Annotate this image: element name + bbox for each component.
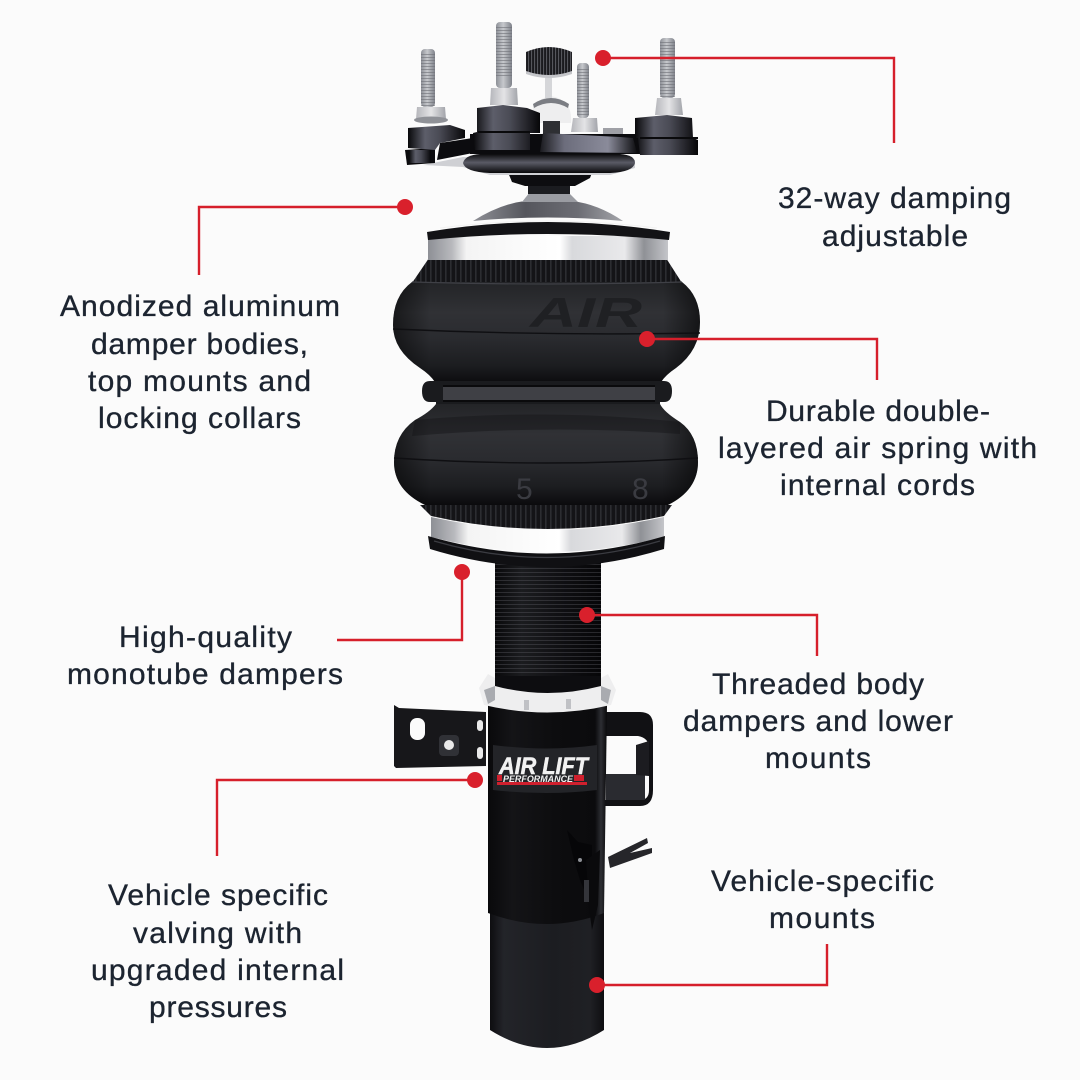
adjuster knob and stem	[526, 47, 572, 135]
lower air spring bellow: 5	[516, 473, 533, 506]
label text 5	[683, 668, 953, 775]
red dot 1	[595, 50, 611, 66]
bolts and nuts	[414, 22, 683, 132]
upper air spring bellow: AIR	[528, 289, 643, 336]
left bracket	[394, 705, 486, 768]
label text 7: Vehicle-specific	[711, 865, 934, 898]
leader line 1	[603, 58, 894, 143]
lower silver band	[431, 517, 664, 552]
upper tube section	[488, 705, 607, 924]
leader line 7	[597, 944, 827, 985]
leader line 4	[337, 572, 462, 640]
label text 2: top mounts and	[88, 365, 311, 398]
label text 6: upgraded internal	[91, 954, 344, 987]
tube mount detail	[567, 830, 600, 930]
right bracket	[598, 712, 653, 806]
red dot 2	[397, 199, 413, 215]
label text 6: valving with	[133, 917, 302, 950]
lower black ring	[428, 536, 665, 567]
callout: vehicle specific valving	[91, 772, 483, 1024]
red dot 7	[589, 977, 605, 993]
label text 3	[718, 395, 1037, 502]
callout: 32-way damping adjustable	[595, 50, 1011, 253]
leader line 2	[199, 207, 405, 275]
top mount hub	[507, 170, 593, 186]
label text 1	[778, 182, 1011, 253]
red dot 5	[579, 607, 595, 623]
label text 6: Vehicle specific	[108, 879, 328, 912]
label text 1: adjustable	[822, 220, 968, 253]
red dot 6	[467, 772, 483, 788]
upper air spring bellow	[393, 282, 700, 384]
air strut product image	[393, 22, 700, 1048]
spring dome cap	[473, 201, 623, 221]
label text 4: monotube dampers	[67, 658, 343, 691]
callout: anodized aluminum	[60, 199, 413, 435]
lower air spring bellow	[394, 404, 698, 506]
upper ribbed neck	[412, 258, 682, 283]
callout: threaded body	[579, 607, 953, 775]
label text 5: mounts	[765, 742, 871, 775]
label text 3: Durable double-	[766, 395, 990, 428]
leader line 6	[217, 780, 475, 856]
upper silver band	[428, 236, 668, 260]
callout: vehicle-specific mounts	[589, 865, 934, 993]
top mount plate and knobs	[405, 105, 698, 175]
lower tube section	[490, 900, 604, 1048]
logo band: Air Lift Performance: PERFORMANCE	[503, 774, 574, 785]
label text 2: Anodized aluminum	[60, 290, 340, 323]
leader line 5	[587, 615, 817, 656]
shaft neck	[522, 183, 578, 202]
label text 5: Threaded body	[712, 668, 924, 701]
waist ring	[422, 381, 672, 402]
callout: monotube dampers	[67, 564, 470, 691]
logo band: Air Lift Performance: AIR LIFT	[498, 753, 590, 780]
label text 2: locking collars	[98, 402, 301, 435]
label text 2	[60, 290, 340, 435]
red dot 3	[639, 331, 655, 347]
label text 3: internal cords	[780, 469, 975, 502]
silver locking collar	[479, 674, 616, 712]
label text 3: layered air spring with	[718, 432, 1037, 465]
callout: durable air spring	[639, 331, 1037, 502]
mounting tab	[608, 838, 652, 868]
waist of air spring	[436, 374, 660, 412]
label text 7	[711, 865, 934, 935]
upper black ring	[427, 221, 670, 240]
label text 2: damper bodies,	[91, 328, 308, 361]
red dot 4	[454, 564, 470, 580]
label text 7: mounts	[769, 902, 875, 935]
lower ribbed neck	[420, 505, 672, 529]
threaded damper body	[495, 562, 601, 697]
label text 6: pressures	[149, 991, 287, 1024]
leader line 3	[647, 339, 877, 380]
label text 1: 32-way damping	[778, 182, 1011, 215]
label text 6	[91, 879, 344, 1024]
label text 4	[67, 621, 343, 691]
lower air spring bellow: 8	[632, 473, 649, 506]
logo band: Air Lift Performance	[493, 745, 597, 793]
label text 4: High-quality	[119, 621, 292, 654]
label text 5: dampers and lower	[683, 705, 953, 738]
